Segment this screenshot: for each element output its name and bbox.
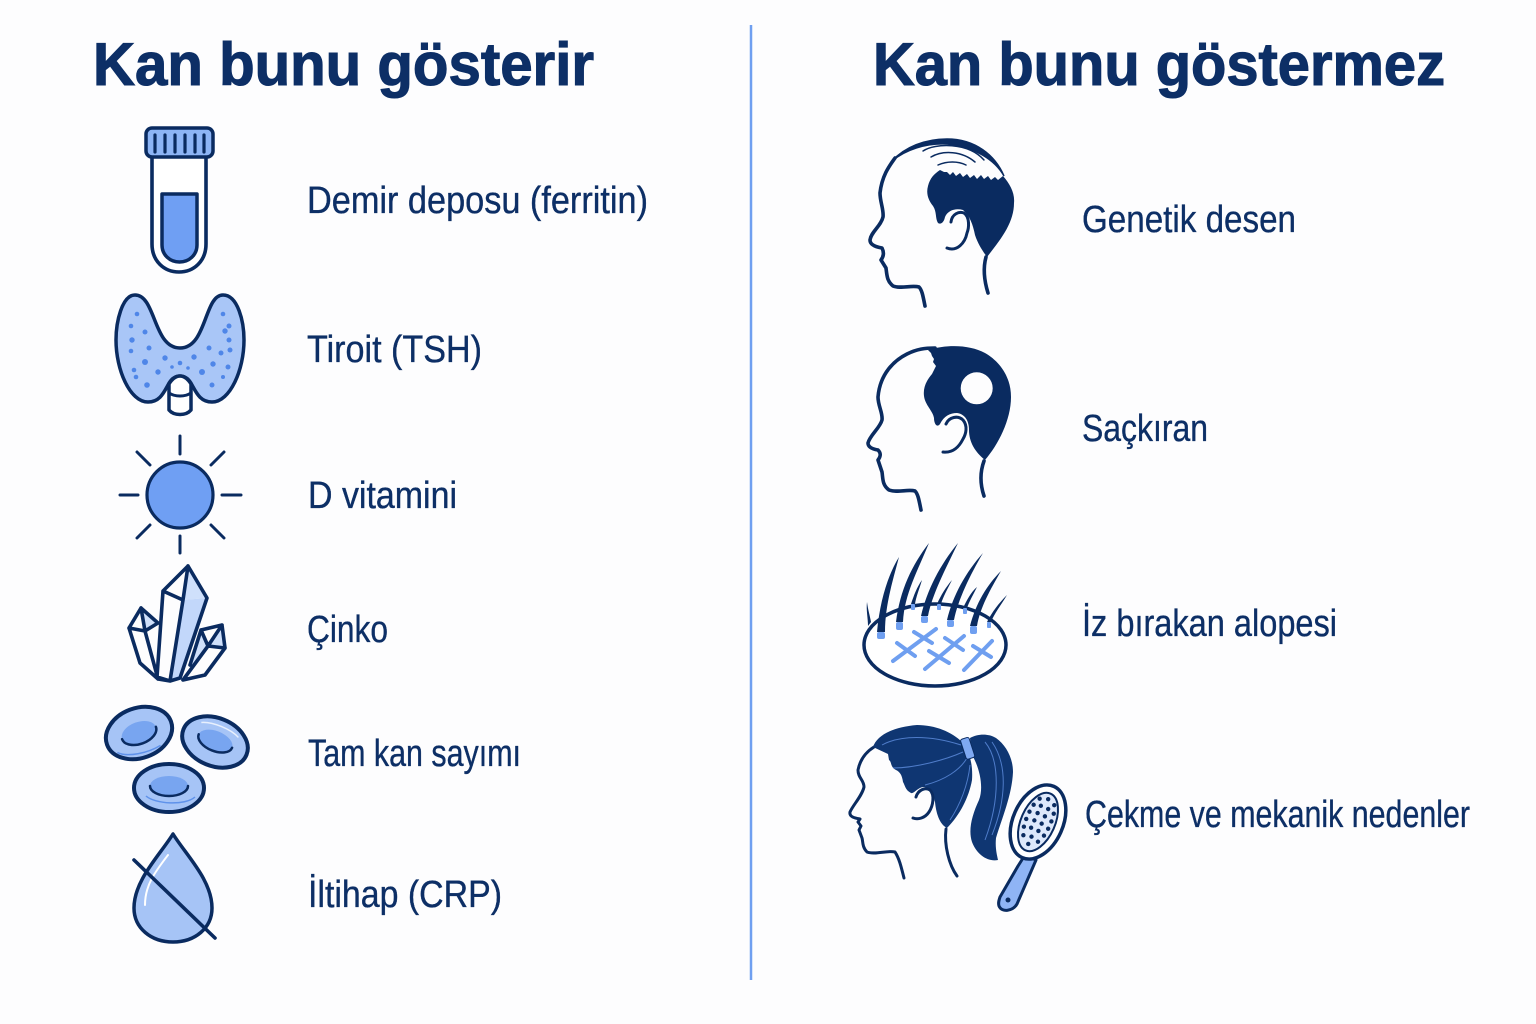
label: genetic pattern: Genetik desen [1082, 199, 1296, 241]
icon: hair brush [999, 776, 1077, 910]
icon: crossed drop [134, 834, 215, 942]
label: thyroid: Tiroit (TSH) [307, 329, 482, 371]
panel: blood shows [93, 31, 648, 942]
icon: scarring alopecia scalp [864, 543, 1007, 686]
icon: alopecia areata head [868, 346, 1011, 510]
heading: blood shows: Kan bunu gösterir [93, 31, 594, 98]
icon: sun [120, 436, 241, 553]
icon: thyroid [116, 295, 244, 414]
label: alopecia areata: Saçkıran [1082, 408, 1208, 450]
label: inflammation: İltihap (CRP) [308, 873, 502, 916]
icon: red blood cells [98, 698, 256, 812]
icon: ponytail head with brush [850, 725, 1077, 910]
label: scarring alopecia: İz bırakan alopesi [1082, 602, 1337, 645]
label: iron stores: Demir deposu (ferritin) [307, 180, 648, 222]
heading: blood does not show: Kan bunu göstermez [873, 31, 1445, 98]
label: zinc: Çinko [307, 609, 388, 651]
label: vitamin D: D vitamini [308, 475, 457, 517]
icon: test tube [146, 128, 213, 272]
icon: crystals [129, 566, 225, 681]
icon: genetic pattern head [870, 139, 1014, 306]
label: complete blood count: Tam kan sayımı [308, 733, 521, 775]
panel: blood does not show [850, 31, 1470, 910]
